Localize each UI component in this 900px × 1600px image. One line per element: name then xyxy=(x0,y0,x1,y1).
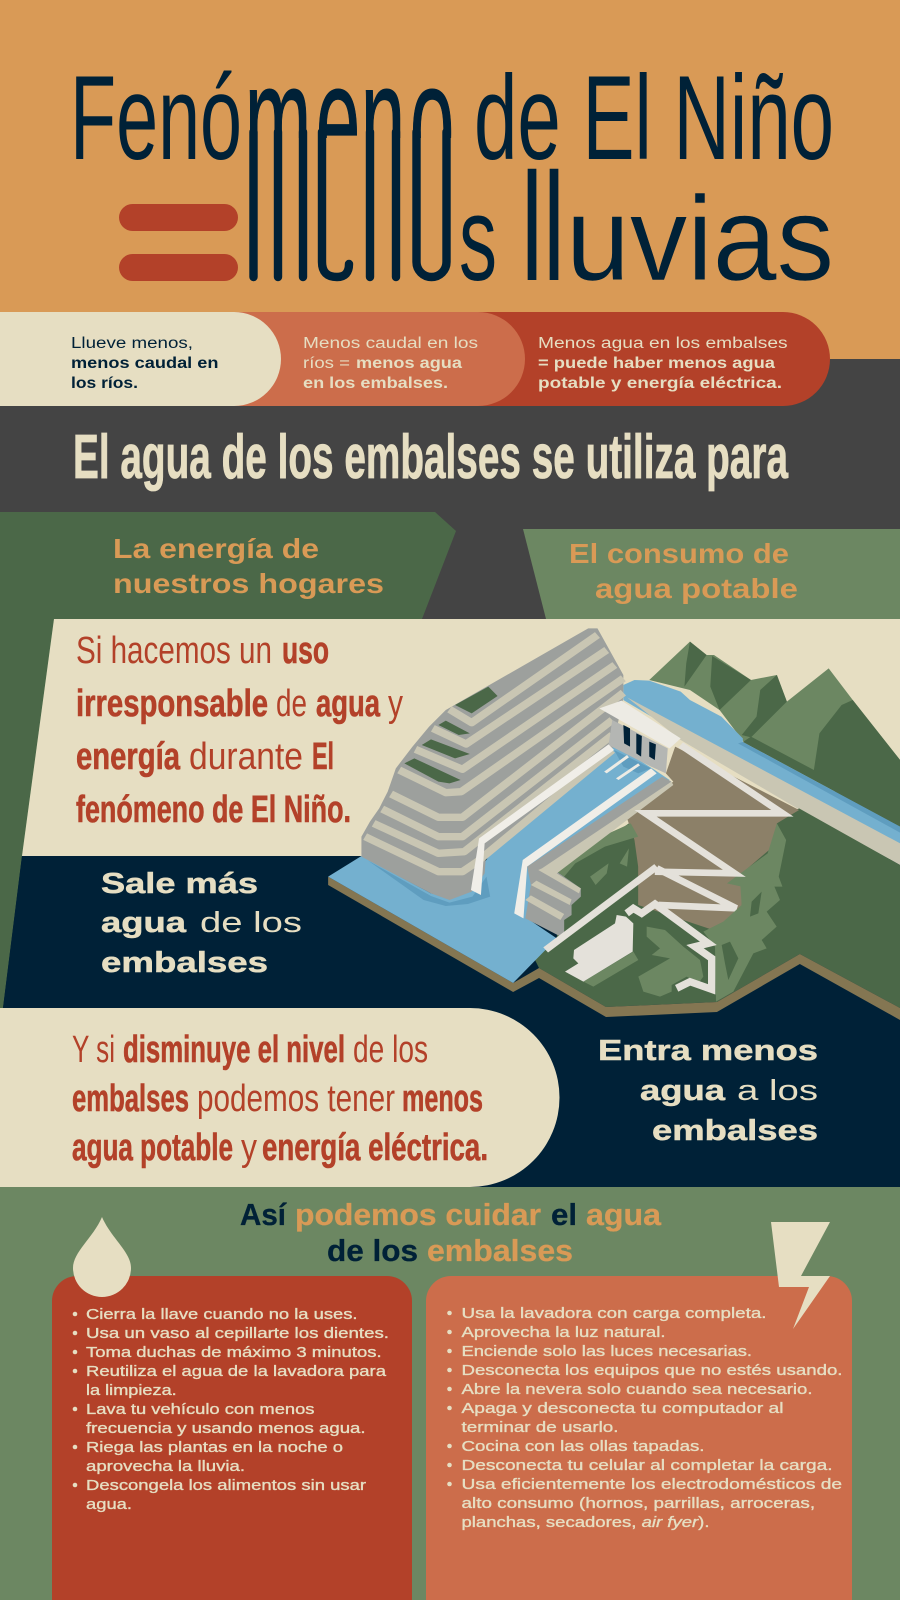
pill: rivers: menos agua xyxy=(356,355,462,372)
icon: water drop xyxy=(73,1217,131,1297)
mountains xyxy=(649,642,900,827)
equals sign xyxy=(119,204,238,281)
pill: less rain: menos caudal en xyxy=(71,355,218,372)
title: s xyxy=(459,172,497,306)
list: water tips: Cierra la llave cuando no la uses. xyxy=(86,1306,358,1323)
title: Fenó xyxy=(70,51,242,185)
panel: energy label: nuestros hogares xyxy=(113,568,384,599)
service roads xyxy=(546,745,782,950)
list: water tips: agua. xyxy=(86,1496,132,1513)
pill: reservoirs: potable y energía eléctrica. xyxy=(538,375,782,392)
panel: drinking water label: agua potable xyxy=(595,573,798,604)
list: energy tips: Cocina con las ollas tapadas. xyxy=(462,1438,704,1455)
dam gates xyxy=(599,701,681,780)
pill: rivers xyxy=(200,312,525,406)
list: water tips: Toma duchas de máximo 3 minutos. xyxy=(86,1344,382,1361)
pill: less rain: Llueve menos, xyxy=(71,335,193,352)
slope xyxy=(627,747,799,933)
panel: irresponsible use: Si hacemos un xyxy=(76,630,272,672)
pill: rivers: Menos caudal en los xyxy=(303,335,478,352)
terrace greenery xyxy=(404,687,498,783)
pill: reservoirs xyxy=(400,312,830,406)
list: energy tips: Desconecta tu celular al completar la carga. xyxy=(462,1457,832,1474)
list: energy tips: Abre la nevera solo cuando sea necesario. xyxy=(462,1381,812,1398)
panel: lower water: energía eléctrica. xyxy=(262,1127,488,1169)
panel: lower water: de los xyxy=(353,1029,428,1071)
list: energy tips: planchas, secadores, air fyer ). xyxy=(462,1514,710,1531)
list: water tips: Riega las plantas en la noche o xyxy=(86,1439,343,1456)
tall word: meno: meno xyxy=(245,31,454,208)
water channel xyxy=(328,743,670,983)
text: less water enters: embalses xyxy=(652,1115,818,1147)
panel: irresponsible use: de xyxy=(276,683,307,725)
heading: how to care: agua xyxy=(586,1197,662,1232)
list: energy tips: Desconecta los equipos que no estés usando. xyxy=(462,1362,842,1379)
text: less water enters: agua xyxy=(640,1075,726,1107)
panel: water tips xyxy=(52,1276,412,1600)
list: water tips: Usa un vaso al cepillarte los dientes. xyxy=(86,1325,389,1342)
panel: energy label xyxy=(0,512,456,1008)
panel: irresponsible use: y xyxy=(388,683,403,725)
list: water tips: Descongela los alimentos sin usar xyxy=(86,1477,366,1494)
text: more water leaves xyxy=(101,868,302,979)
panel: irresponsible use: uso xyxy=(282,630,329,672)
panel: lower water: embalses xyxy=(72,1078,189,1120)
lower hillside detail xyxy=(565,880,780,1002)
right bank terraces xyxy=(525,777,673,938)
spillway walls xyxy=(471,744,657,918)
text: more water leaves: Sale más xyxy=(101,868,258,900)
panel: lower water: agua potable xyxy=(72,1127,233,1169)
navy band under the panel xyxy=(0,856,700,1187)
dam crest xyxy=(627,697,900,865)
panel: irresponsible use: energía xyxy=(76,736,181,778)
pill: rivers: en los embalses. xyxy=(303,375,448,392)
terraced hill xyxy=(361,628,623,900)
list: energy tips: Usa eficientemente los electrodomésticos de xyxy=(462,1476,842,1493)
panel: lower water: menos xyxy=(402,1078,483,1120)
pill: reservoirs: = puede haber menos agua xyxy=(538,355,775,372)
panel: lower water: disminuye el nivel xyxy=(123,1029,345,1071)
title: uvias xyxy=(566,172,834,306)
reservoir xyxy=(623,680,900,844)
list: energy tips xyxy=(447,1305,842,1531)
list: energy tips: Aprovecha la luz natural. xyxy=(462,1324,666,1341)
land xyxy=(531,808,900,1008)
panel: irresponsible use: irresponsable xyxy=(76,683,268,725)
panel: drinking water label: El consumo de xyxy=(569,538,789,569)
navy behind the land on the right xyxy=(789,792,900,984)
heading: how to care: embalses xyxy=(427,1233,573,1268)
panel: irresponsible use: El xyxy=(312,736,334,778)
text: less water enters: a los xyxy=(737,1075,818,1107)
list: water tips: la limpieza. xyxy=(86,1382,177,1399)
panel: irresponsible use: durante xyxy=(189,736,303,778)
heading: how to care: de los xyxy=(327,1233,418,1268)
pill: less rain: los ríos. xyxy=(71,375,138,392)
title: ll xyxy=(521,142,565,313)
panel: irresponsible use xyxy=(22,619,900,1000)
list: water tips: aprovecha la lluvia. xyxy=(86,1458,245,1475)
illustration: dam and reservoirs xyxy=(322,628,900,1030)
text: less water enters xyxy=(598,1035,818,1147)
list: water tips: Lava tu vehículo con menos xyxy=(86,1401,314,1418)
icon: lightning bolt xyxy=(771,1222,830,1329)
panel: energy label: La energía de xyxy=(113,533,319,564)
panel: lower water: podemos tener xyxy=(197,1078,395,1120)
pill: rivers: ríos = xyxy=(303,355,350,372)
text: more water leaves: de los xyxy=(200,907,302,939)
list: energy tips: Enciende solo las luces necesarias. xyxy=(462,1343,752,1360)
heading: how to care: podemos cuidar xyxy=(295,1197,541,1232)
heading: how to care xyxy=(240,1197,662,1268)
tall word: meno xyxy=(249,88,452,282)
panel: lower water xyxy=(0,1008,560,1187)
heading: how to care: Así xyxy=(240,1197,287,1232)
pill: less rain xyxy=(0,312,281,406)
pill: reservoirs: Menos agua en los embalses xyxy=(538,335,788,352)
panel: energy tips xyxy=(426,1276,852,1600)
list: water tips: Reutiliza el agua de la lavadora para xyxy=(86,1363,387,1380)
heading: how to care: el xyxy=(551,1197,577,1232)
list: energy tips: Usa la lavadora con carga completa. xyxy=(462,1305,766,1322)
text: less water enters: Entra menos xyxy=(598,1035,818,1067)
list: energy tips: Apaga y desconecta tu computador al xyxy=(462,1400,784,1417)
flow pills xyxy=(0,312,830,406)
panel: lower water: y xyxy=(241,1127,257,1169)
panel: irresponsible use: fenómeno de El Niño. xyxy=(76,789,351,831)
list: water tips: frecuencia y usando menos agua. xyxy=(86,1420,366,1437)
hillside patch xyxy=(557,823,638,877)
title xyxy=(70,31,834,313)
panel: irresponsible use: agua xyxy=(316,683,381,725)
panel: lower water: Y si xyxy=(72,1029,115,1071)
list: energy tips: alto consumo (hornos, parrillas, arroceras, xyxy=(462,1495,815,1512)
list: energy tips: terminar de usarlo. xyxy=(462,1419,618,1436)
text: more water leaves: embalses xyxy=(101,947,268,979)
text: more water leaves: agua xyxy=(101,907,187,939)
rim xyxy=(328,877,900,1020)
panel: drinking water label xyxy=(523,529,900,619)
list: water tips xyxy=(73,1306,389,1513)
